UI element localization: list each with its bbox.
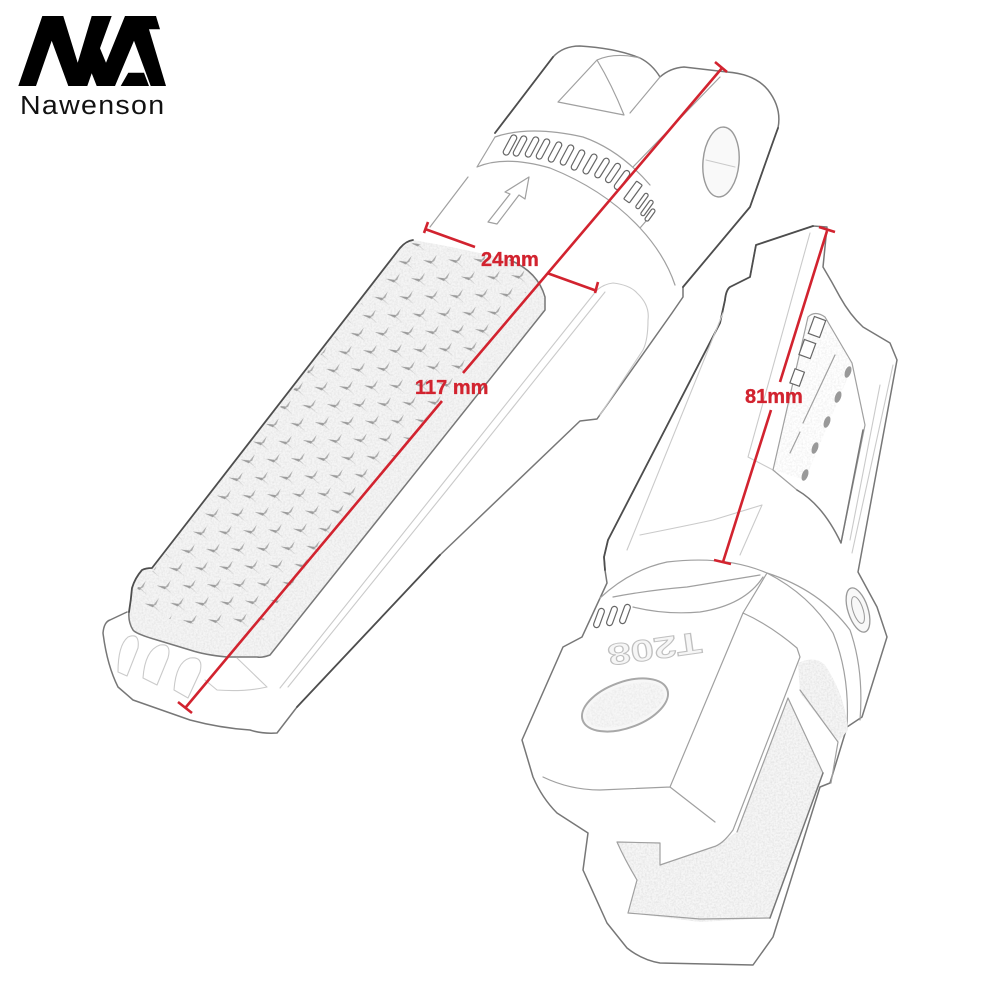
collar ring — [600, 560, 861, 727]
dimension line — [178, 62, 727, 713]
grip right shadow edge — [770, 773, 823, 918]
dimension line — [424, 222, 598, 293]
diamond tread pattern — [136, 243, 533, 630]
slot panel dark edges — [797, 430, 863, 543]
dimension: length 81mm — [714, 227, 835, 564]
grip pad — [129, 240, 545, 657]
panel slots and bumps — [790, 316, 853, 482]
grip grain — [129, 240, 545, 657]
toe slots — [118, 636, 201, 698]
right foot peg — [522, 226, 897, 965]
dark outer edges — [297, 57, 778, 707]
dimension: width 24mm — [424, 222, 598, 293]
direction arrow — [488, 177, 529, 224]
dark left and top edges — [604, 226, 813, 570]
dimension label: 81mm — [745, 386, 803, 408]
collar bolt — [841, 585, 875, 635]
clamp band slots — [502, 134, 656, 222]
upper body inner lines — [627, 233, 893, 555]
collar slots — [593, 604, 631, 628]
head cutout triangle — [558, 55, 720, 167]
slot panel — [773, 314, 865, 543]
grip left dark edge — [129, 240, 413, 612]
collar inner grain — [798, 659, 848, 742]
left foot peg — [103, 46, 779, 733]
engraved part number: T208 — [606, 625, 704, 672]
clamp band — [430, 131, 675, 285]
dimension label: 24mm — [481, 249, 539, 271]
slot panel texture — [773, 317, 853, 480]
textured grip under side — [617, 698, 823, 922]
body block lines — [543, 613, 838, 919]
mounting hole — [700, 126, 742, 198]
logo: Nawenson — [18, 16, 166, 120]
peg body outline — [522, 226, 897, 965]
logo mark — [18, 16, 166, 86]
dimension label: 117 mm — [415, 377, 488, 399]
long body lines — [205, 283, 648, 691]
grip grain — [617, 698, 823, 922]
grip outline — [129, 260, 545, 657]
collar inner texture — [798, 659, 848, 742]
dimension line — [714, 227, 835, 564]
peg body outline — [103, 46, 779, 733]
logo wordmark: Nawenson — [20, 90, 164, 120]
mounting hole — [575, 668, 675, 742]
